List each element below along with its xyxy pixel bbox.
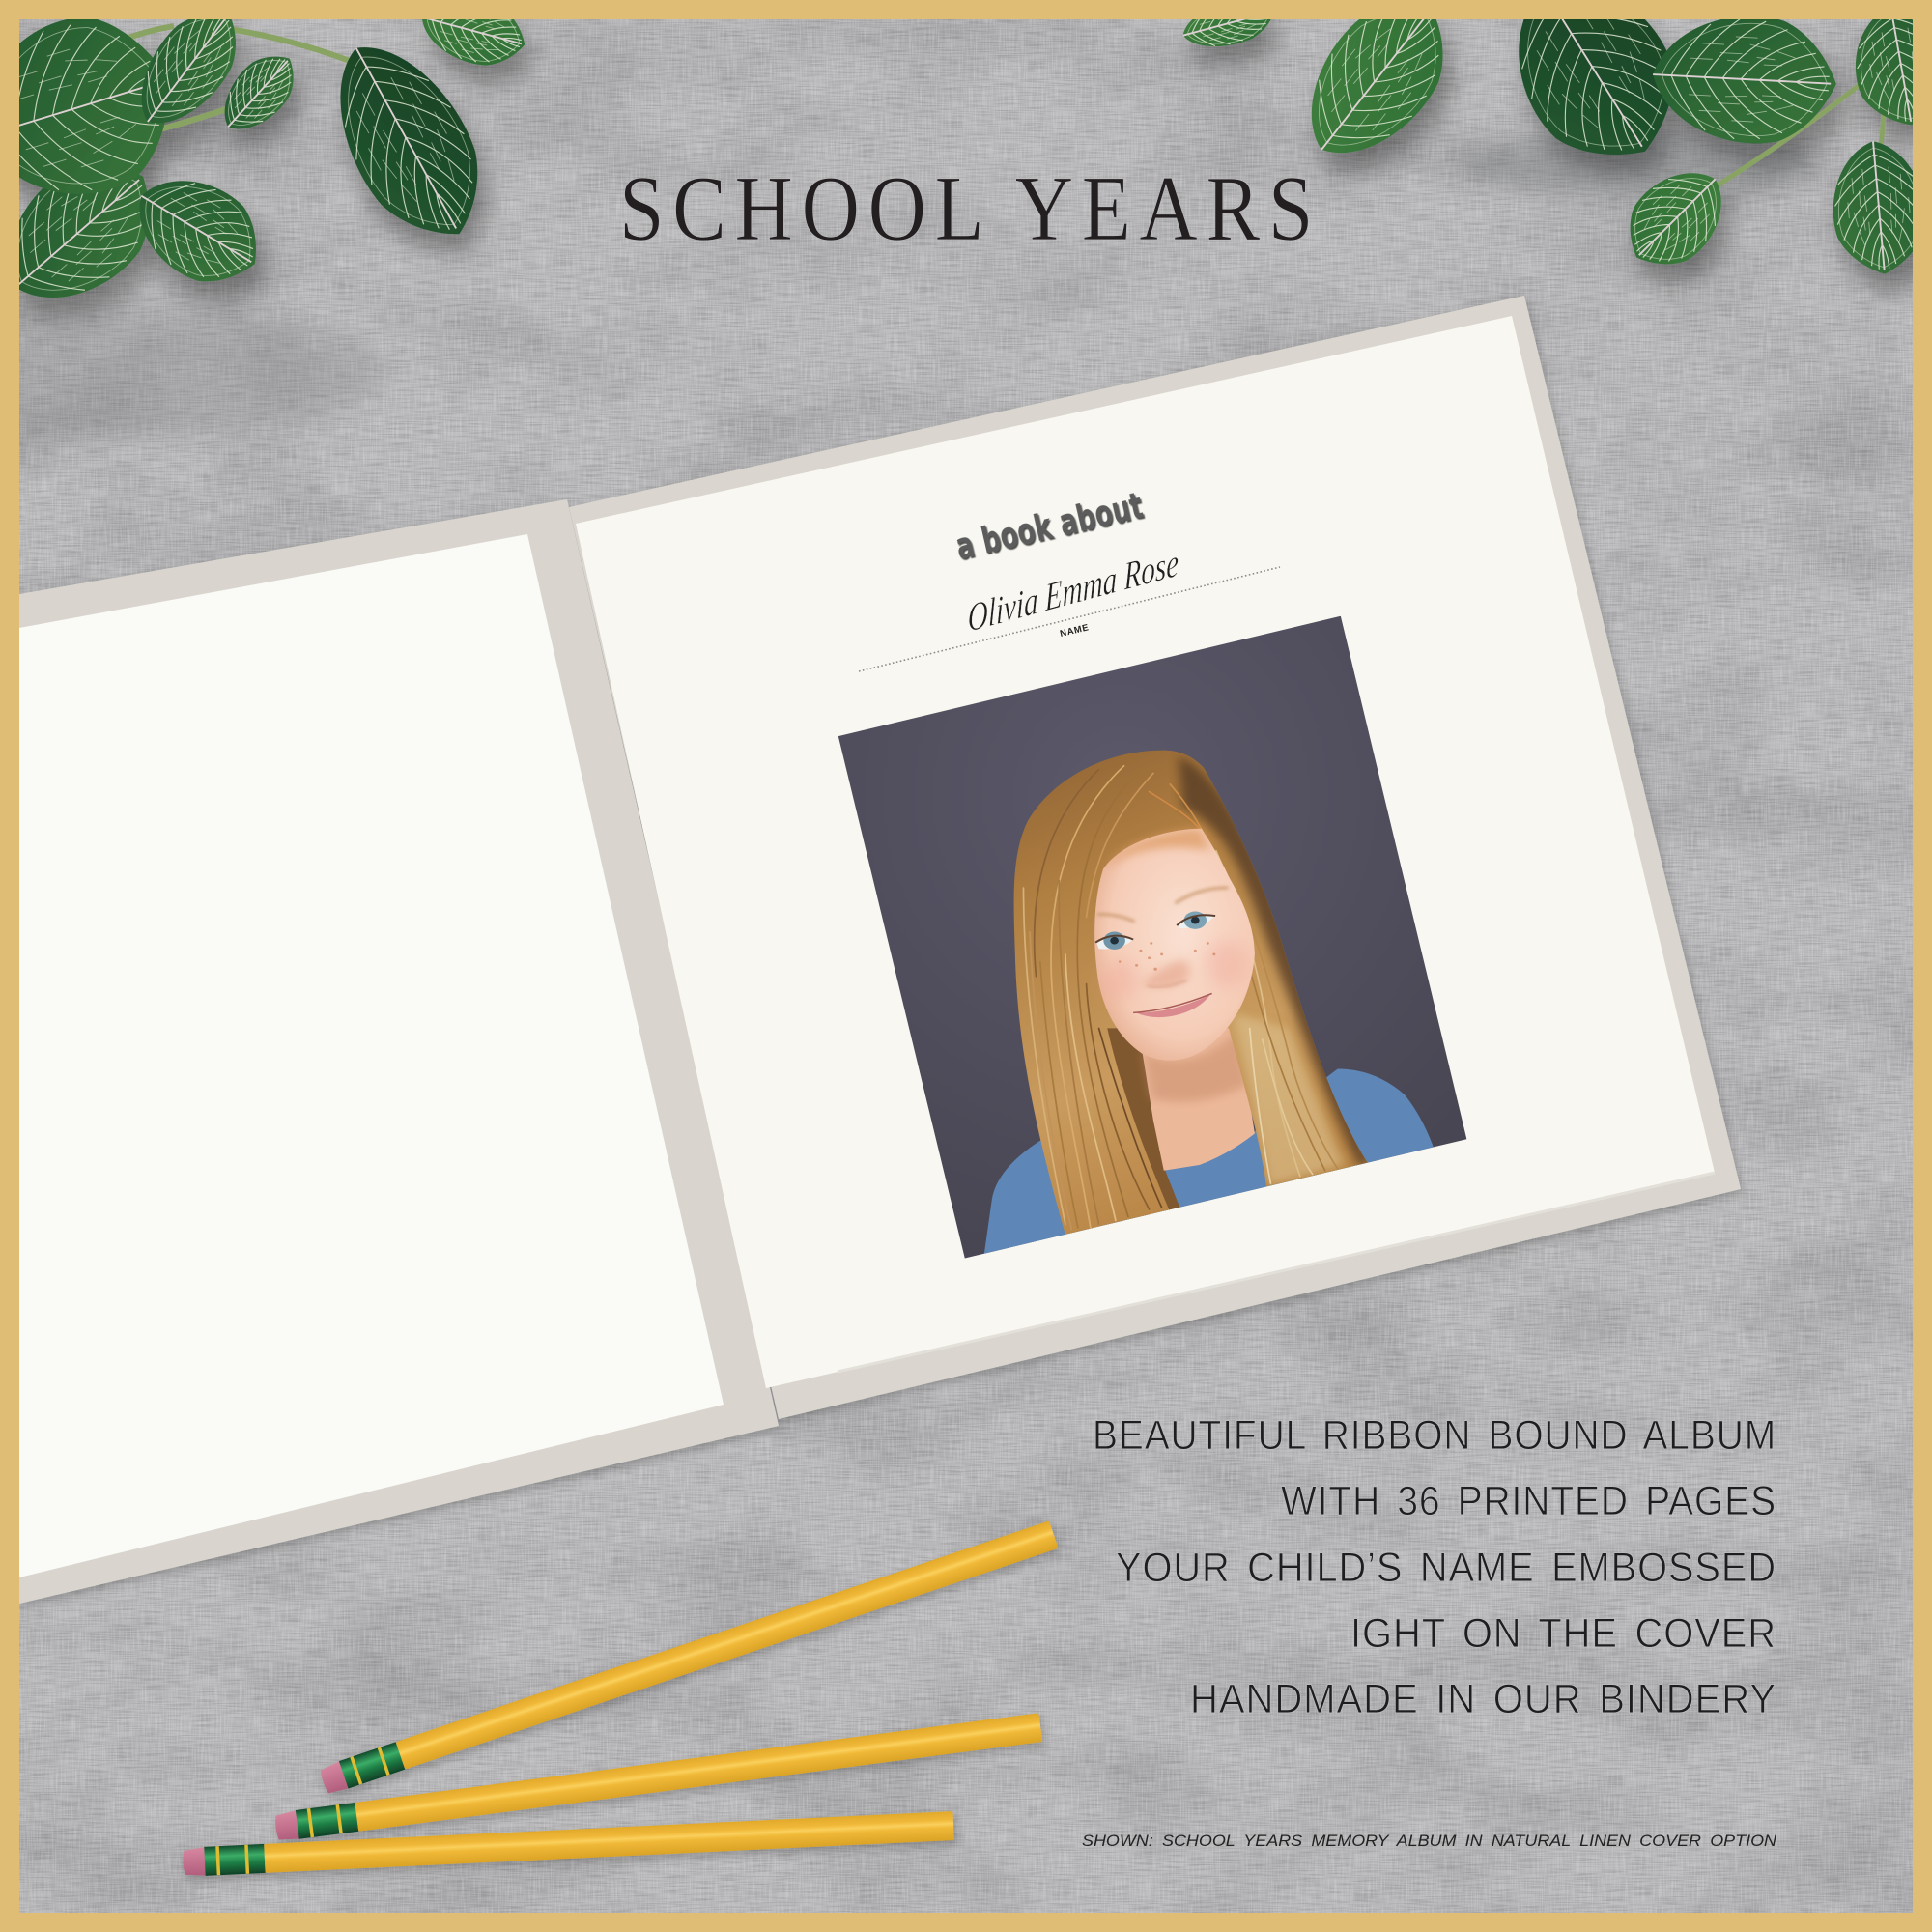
- hairline warm tone: [1103, 829, 1209, 869]
- leaf: hanging small: [1608, 151, 1744, 286]
- hair shading clipped to hair: [1179, 756, 1371, 1185]
- stems: top-right: [1716, 77, 1884, 186]
- line 1: BEAUTIFUL RIBBON BOUND ALBUM: [1093, 1412, 1776, 1459]
- bullet text block: [1093, 1412, 1776, 1722]
- neck shadow hair side: [1099, 1021, 1180, 1213]
- face: [1094, 829, 1255, 1061]
- leaf: horizontal: [1650, 11, 1839, 148]
- foliage: top-left leaves: [0, 0, 533, 330]
- line 3: YOUR CHILD’S NAME EMBOSSED: [1116, 1545, 1776, 1591]
- embossed heading: a book about: a book about: [952, 485, 1147, 568]
- left eye: [1095, 932, 1133, 950]
- neck shading: [1143, 1028, 1250, 1102]
- hair strands: [1024, 766, 1338, 1230]
- leaf: large left: [19, 19, 179, 210]
- eyebrows: [1099, 888, 1227, 921]
- page stack edge: [838, 1173, 1715, 1372]
- leaf: bright green: [1279, 0, 1474, 183]
- caption: shown option: SHOWN: SCHOOL YEARS MEMORY ALBUM IN NATURAL LINEN COVER OPTION: [1082, 1832, 1777, 1850]
- freckles: [1119, 942, 1215, 971]
- leaf: lower left behind: [19, 174, 164, 329]
- leaf: dark: [1481, 0, 1707, 190]
- dotted name line: [859, 567, 1280, 671]
- pencil: bottom: [183, 1811, 954, 1877]
- name caption: NAME: [1059, 622, 1090, 639]
- book: open album: [19, 296, 1741, 1604]
- line 4: IGHT ON THE COVER: [1350, 1610, 1776, 1657]
- leaf: small: [209, 41, 309, 145]
- line 2: WITH 36 PRINTED PAGES: [1281, 1478, 1776, 1524]
- left blank page: [19, 534, 724, 1577]
- leaf: large dark: [306, 20, 509, 262]
- leaf: clipped at top: [1178, 0, 1280, 57]
- handwritten name: Olivia Emma Rose: [967, 540, 1179, 640]
- title: SCHOOL YEARS: [619, 156, 1321, 260]
- leaf: top: [413, 0, 533, 75]
- right page: [576, 316, 1715, 1388]
- shirt: [981, 1069, 1438, 1272]
- pencils: [183, 1520, 1059, 1877]
- hair: [1014, 751, 1368, 1235]
- pencil: middle: [274, 1713, 1042, 1842]
- leaf: lower centre: [139, 181, 276, 313]
- stems: top-left: [118, 26, 350, 132]
- leaf: upper centre: [141, 19, 255, 149]
- right cover board: [569, 296, 1741, 1419]
- leaf: right upper: [1845, 0, 1932, 133]
- line 5: HANDMADE IN OUR BINDERY: [1190, 1676, 1776, 1722]
- right eye: [1177, 911, 1215, 929]
- neck: [1141, 1021, 1255, 1171]
- photo backdrop: [810, 584, 1501, 1287]
- leaf: right lower: [1827, 137, 1931, 278]
- left cover board: [19, 499, 779, 1604]
- nose: [1143, 960, 1189, 987]
- photo: portrait of a smiling girl: [810, 584, 1501, 1287]
- cheeks: [1103, 940, 1248, 1001]
- foliage: top-right leaves: [1178, 0, 1932, 286]
- pencil: top: [319, 1520, 1059, 1796]
- smile: [1136, 995, 1209, 1017]
